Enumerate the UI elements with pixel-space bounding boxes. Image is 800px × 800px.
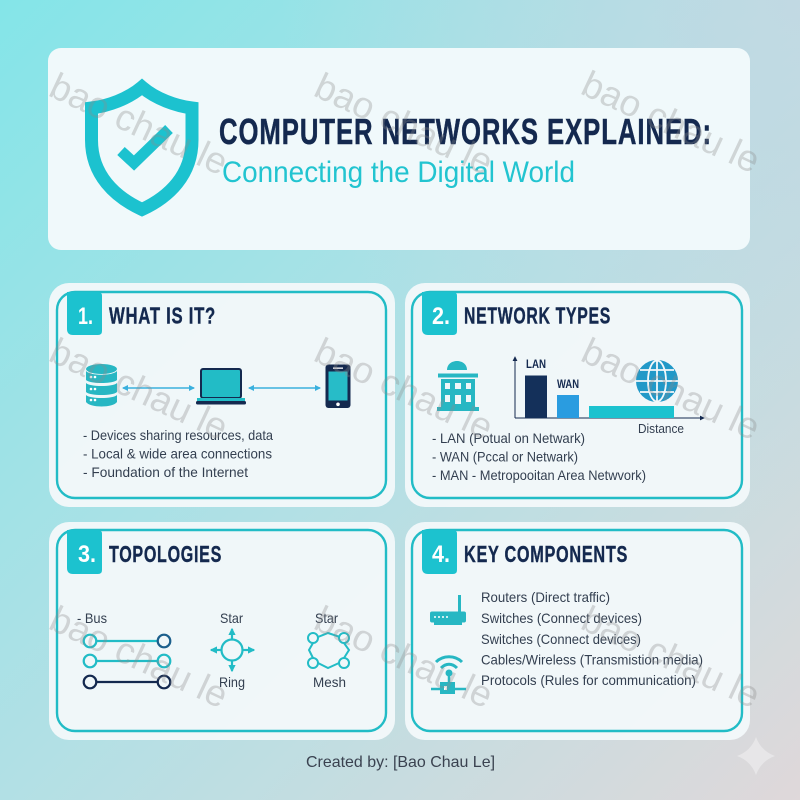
heading: network types: NETWORK TYPES: [464, 302, 611, 328]
text: network types bullets: - MAN - Metropooitan Area Netwvork): [432, 467, 646, 483]
chart: network distance: LAN: [526, 357, 546, 371]
icon: building: [437, 361, 479, 411]
badge 2: [422, 292, 457, 335]
text: what is it bullets: - Devices sharing resources, data: [83, 427, 273, 443]
heading: what is it: WHAT IS IT?: [109, 302, 216, 328]
text: what is it bullets: [83, 427, 273, 480]
watermarks: bao chau le: [576, 63, 766, 181]
icon: sparkle: [737, 737, 775, 775]
panel: network types: [405, 283, 750, 507]
chart: network distance: Distance: [638, 421, 684, 436]
diagram: mesh: Star: [315, 610, 338, 626]
diagram: star: Ring: [219, 674, 245, 690]
text: what is it bullets: - Local & wide area connections: [83, 446, 272, 462]
watermarks: bao chau le: [44, 65, 234, 183]
text: network types bullets: [432, 430, 646, 483]
icon: database: [86, 364, 117, 406]
arrow: database to laptop: [123, 387, 194, 389]
panel: key components: [405, 522, 750, 740]
panel: header: [48, 48, 750, 250]
text: components list: Cables/Wireless (Transmistion media): [481, 652, 703, 668]
panel: topologies: [49, 522, 395, 740]
diagram: mesh: [308, 610, 349, 690]
watermarks: bao chau le: [576, 330, 766, 448]
chart: network distance: [515, 357, 704, 436]
watermarks: bao chau le: [309, 65, 499, 183]
text: what is it bullets: - Foundation of the Internet: [83, 464, 248, 480]
text: components list: Switches (Connect devices): [481, 631, 641, 647]
diagram: star: [211, 610, 254, 690]
diagram: bus: - Bus: [77, 610, 107, 626]
watermarks: bao chau le: [44, 330, 234, 448]
text: components list: Protocols (Rules for communication): [481, 672, 696, 688]
icon: laptop: [196, 369, 246, 404]
badge 2: 2.: [432, 303, 450, 330]
icon: shield with check: [92, 87, 192, 210]
diagram: bus: [77, 610, 170, 688]
chart: network distance: WAN: [557, 377, 579, 391]
text: network types bullets: - WAN (Pccal or Netwark): [432, 448, 578, 464]
arrow: laptop to phone: [249, 387, 320, 389]
diagram: mesh: Mesh: [313, 674, 346, 690]
footer credit: Created by: [Bao Chau Le]: [306, 754, 495, 771]
icon: phone: [326, 364, 350, 408]
icon: wifi and cable: [431, 657, 466, 694]
text: network types bullets: - LAN (Potual on Netwark): [432, 430, 585, 446]
icon: router: [430, 595, 466, 625]
watermarks: [44, 63, 766, 716]
panel: what is it: [49, 283, 395, 507]
badge 1: 1.: [78, 303, 93, 330]
subtitle: Connecting the Digital World: [222, 156, 575, 189]
badge 1: [67, 292, 102, 335]
icon: globe: [636, 360, 678, 402]
badge 4: 4.: [432, 541, 450, 568]
heading: key components: KEY COMPONENTS: [464, 541, 628, 567]
badge 3: [67, 530, 102, 574]
watermarks: bao chau le: [576, 598, 766, 716]
watermarks: bao chau le: [309, 598, 499, 716]
watermarks: bao chau le: [309, 330, 499, 448]
text: components list: [481, 589, 703, 688]
badge 4: [422, 530, 457, 574]
text: components list: Switches (Connect devices): [481, 610, 642, 626]
text: components list: Routers (Direct traffic): [481, 589, 610, 605]
badge 3: 3.: [78, 541, 96, 568]
heading: topologies: TOPOLOGIES: [109, 541, 222, 567]
diagram: star: Star: [220, 610, 243, 626]
watermarks: bao chau le: [44, 598, 234, 716]
